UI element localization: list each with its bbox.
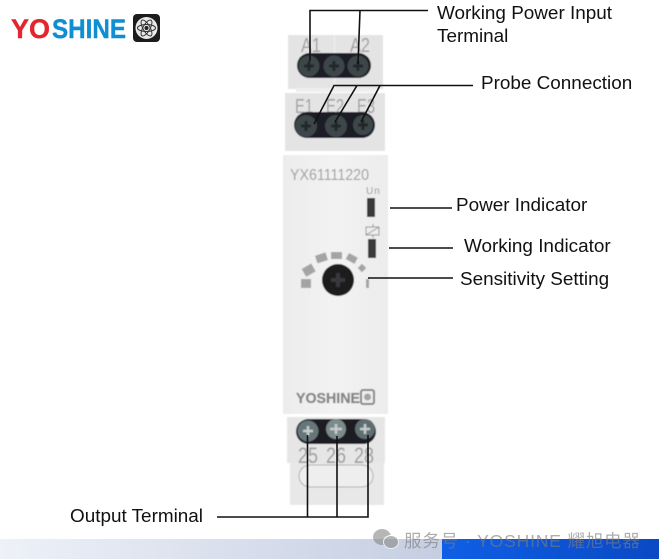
label: Sensitivity Setting: Sensitivity Setting — [460, 269, 609, 290]
output terminal block: 28 — [354, 443, 374, 468]
top terminal block A1 A2: A2 — [350, 35, 370, 57]
icon: chat bubbles — [373, 529, 398, 548]
label: Probe Connection: Probe Connection — [481, 73, 632, 94]
output terminal block: 26 — [326, 443, 346, 468]
probe terminal block E1 E2 E3: E2 — [326, 96, 344, 118]
probe terminal block E1 E2 E3 — [285, 93, 385, 151]
output terminal block: 25 — [298, 443, 318, 468]
label: Working Power Input Terminal: Terminal — [437, 26, 508, 47]
logo: YOSHINE: YO — [11, 14, 50, 44]
label: Working Power Input Terminal: Working Power Input — [437, 3, 613, 24]
leader lines — [217, 10, 473, 517]
body logo: YOSHINE — [296, 390, 360, 407]
output terminal block — [287, 417, 385, 505]
logo: YOSHINE — [11, 14, 160, 44]
power LED window — [367, 198, 375, 217]
probe terminal block E1 E2 E3: E3 — [357, 96, 375, 118]
label: Working Indicator: Working Indicator — [464, 236, 611, 257]
model number: YX61111220 — [290, 167, 369, 184]
label: Power Indicator: Power Indicator — [456, 195, 587, 216]
relay device — [283, 35, 388, 505]
Un label: Un — [366, 186, 381, 197]
watermark: 服务号 · YOSHINE 耀旭电器 — [404, 531, 640, 551]
label: Output Terminal: Output Terminal — [70, 506, 203, 527]
probe terminal block E1 E2 E3: E1 — [295, 96, 313, 118]
main body — [283, 155, 388, 414]
relay symbol — [366, 224, 379, 238]
top terminal block A1 A2 — [288, 35, 383, 92]
bottom band — [0, 539, 659, 559]
working LED window — [368, 239, 376, 258]
top terminal block A1 A2: A1 — [301, 35, 321, 57]
sensitivity scale — [301, 252, 369, 288]
logo: YOSHINE: SHINE — [52, 14, 126, 44]
icon: atom — [133, 14, 160, 42]
sensitivity knob — [322, 264, 354, 296]
